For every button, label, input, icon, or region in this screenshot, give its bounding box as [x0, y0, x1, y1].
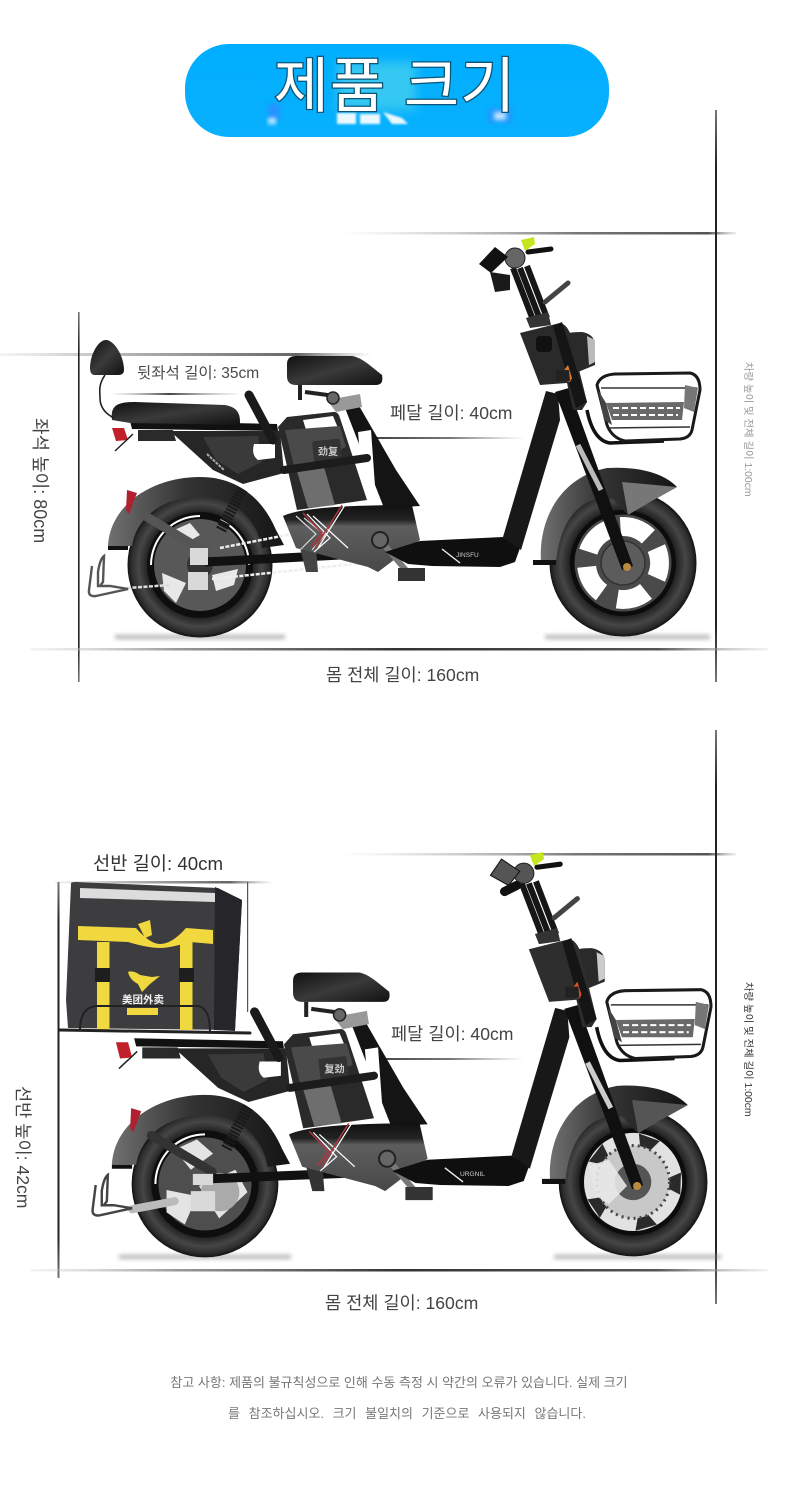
- battery: [278, 412, 376, 510]
- label: pedal length: 페달 길이: 40cm: [390, 403, 512, 423]
- bike: bottom, delivery box version: [93, 852, 721, 1259]
- basket: [587, 373, 700, 443]
- front panel and headlight 2: [529, 938, 605, 1027]
- handlebar 2: [490, 852, 577, 944]
- front wheel: [550, 490, 696, 636]
- seat post and frame: [345, 404, 420, 508]
- front panel and headlight: [520, 322, 595, 410]
- rear wheel: [128, 492, 272, 638]
- label: seat height: 좌석 높이: 80cm: [30, 418, 50, 543]
- label: body total length: 몸 전체 길이: 160cm: [326, 665, 479, 685]
- front fork: [555, 388, 633, 571]
- label: shelf height: 선반 높이: 42cm: [13, 1086, 33, 1208]
- rack rail: [80, 1006, 210, 1032]
- ground shadow 2: [119, 1255, 721, 1259]
- label: vehicle height side note: 차량 높이 및 전체 길이 1:00cm: [742, 362, 755, 497]
- seat post and frame 2: [352, 1021, 428, 1126]
- main seat 2: [293, 972, 390, 1029]
- front wheel with disc 2: [559, 1108, 707, 1256]
- footboard: [385, 537, 520, 567]
- box brand text: 美团外卖: [122, 992, 164, 1007]
- front down tube: [503, 391, 560, 550]
- label: body total length 2: 몸 전체 길이: 160cm: [325, 1293, 478, 1313]
- yellow straps: [78, 920, 213, 1030]
- dimension lines: top section: [0, 110, 768, 682]
- rear seat with frame: [112, 395, 284, 484]
- title pill: [185, 38, 609, 137]
- frame crossbar 2: [290, 1076, 374, 1088]
- kickstand: [89, 556, 128, 596]
- box buckles: [95, 968, 194, 982]
- label: shelf length: 선반 길이: 40cm: [93, 853, 223, 874]
- footnote: 참고 사항: 제품의 불규칙성으로 인해 수동 측정 시 약간의 오류가 있습니다. 실제 크기: [170, 1375, 628, 1390]
- battery 2: [284, 1029, 383, 1128]
- frame crossbar: [284, 458, 367, 470]
- rear wheel 2: [132, 1111, 278, 1257]
- rear fender: [108, 477, 284, 548]
- rear shock 2: [226, 1106, 249, 1149]
- swingarm, strut and chain: [127, 517, 400, 590]
- footnote: 를 참조하십시오. 크기 불일치의 기준으로 사용되지 않습니다.: [228, 1406, 586, 1421]
- label: rear seat length: 뒷좌석 길이: 35cm: [137, 364, 259, 382]
- rear frame 2: [116, 1012, 290, 1102]
- ground shadow: [115, 635, 710, 639]
- main seat: [287, 356, 382, 412]
- dimension lines: bottom section: [30, 730, 768, 1304]
- footboard logo: JINSFU: [456, 552, 479, 559]
- delivery box on rack: [60, 882, 250, 1033]
- label: vehicle height side note 2: 차량 높이 및 전체 길이 1:00cm: [742, 982, 755, 1117]
- box reflective strip: [80, 888, 215, 902]
- motor cover 2: [289, 1123, 433, 1200]
- front fender: [533, 468, 677, 565]
- front fender 2: [542, 1086, 688, 1184]
- kickstand 2: [93, 1175, 132, 1215]
- swingarm and brake 2: [132, 1135, 407, 1211]
- title text: 제품 크기: [274, 38, 516, 125]
- rear shock: [221, 488, 243, 530]
- battery brand text 2: 复劲: [324, 1061, 345, 1076]
- front down tube 2: [512, 1008, 569, 1169]
- box body: [66, 882, 242, 1030]
- footnote: [170, 1375, 628, 1421]
- basket 2: [597, 990, 711, 1061]
- rear fender 2: [112, 1095, 290, 1167]
- footboard 2: [392, 1156, 529, 1186]
- footboard logo 2: URGNIL: [460, 1171, 485, 1178]
- front fork 2: [564, 1005, 643, 1190]
- bike: top, rear seat version: [89, 237, 710, 639]
- handlebar: [479, 237, 568, 328]
- label: pedal length 2: 페달 길이: 40cm: [391, 1024, 513, 1044]
- battery brand text: 劲复: [318, 443, 338, 458]
- motor cover: [283, 505, 425, 581]
- headrest with wire: [90, 340, 124, 418]
